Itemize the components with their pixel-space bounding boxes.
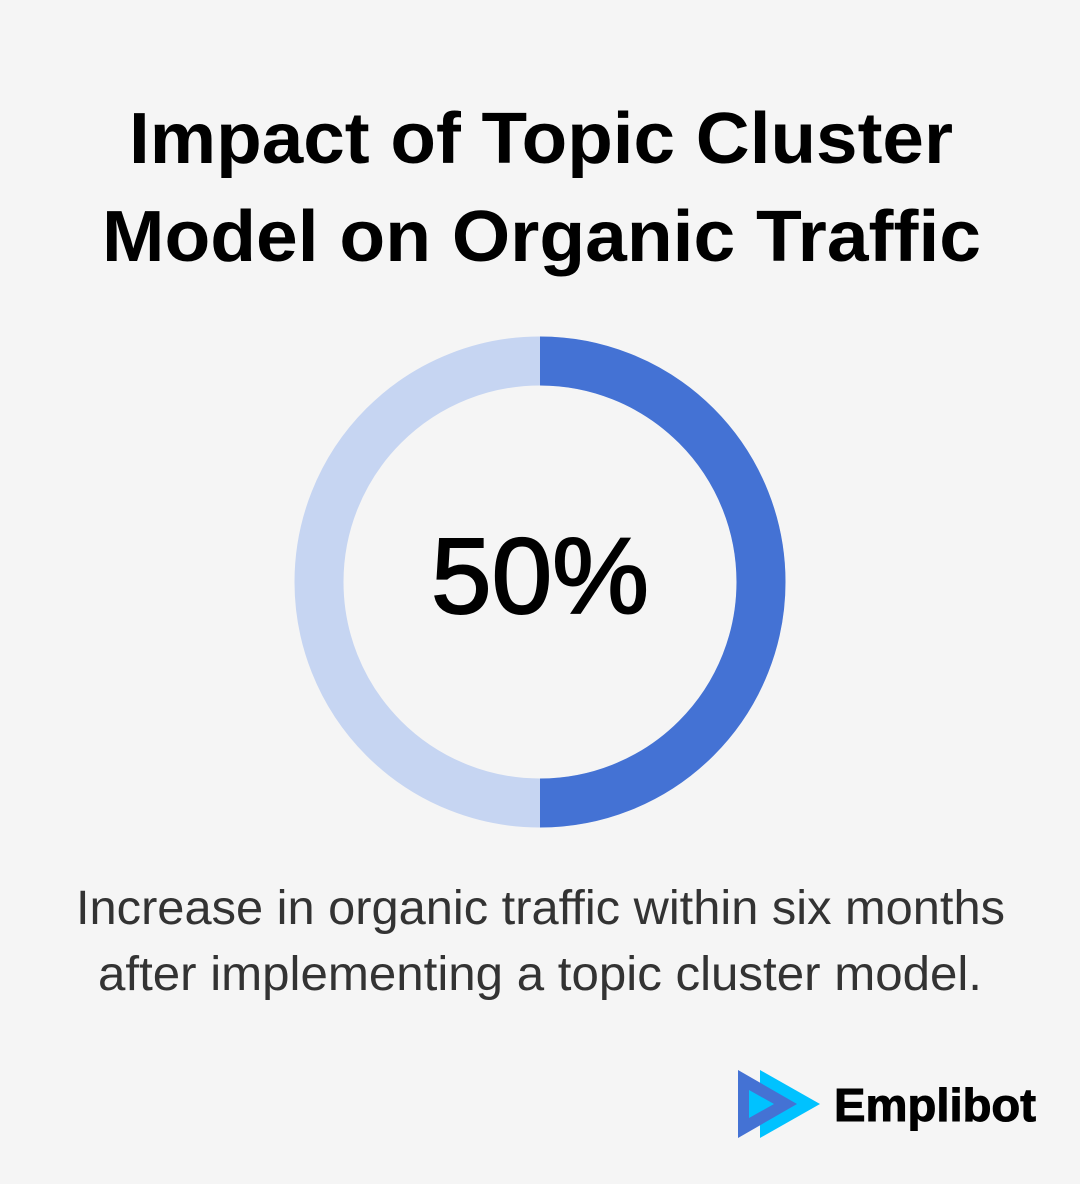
title — [102, 99, 981, 277]
logo wordmark: Emplibot — [834, 1079, 1036, 1131]
description text — [76, 882, 1005, 1001]
description text: after implementing a topic cluster model. — [98, 948, 982, 1001]
title: Impact of Topic Cluster — [129, 99, 953, 179]
description text: Increase in organic traffic within six months — [76, 882, 1005, 935]
donut value: 50% — [431, 515, 649, 636]
icon: play triangles — [738, 1070, 820, 1138]
logo: Emplibot — [738, 1070, 1036, 1138]
title: Model on Organic Traffic — [102, 197, 981, 277]
donut chart: 50% — [319, 361, 761, 803]
